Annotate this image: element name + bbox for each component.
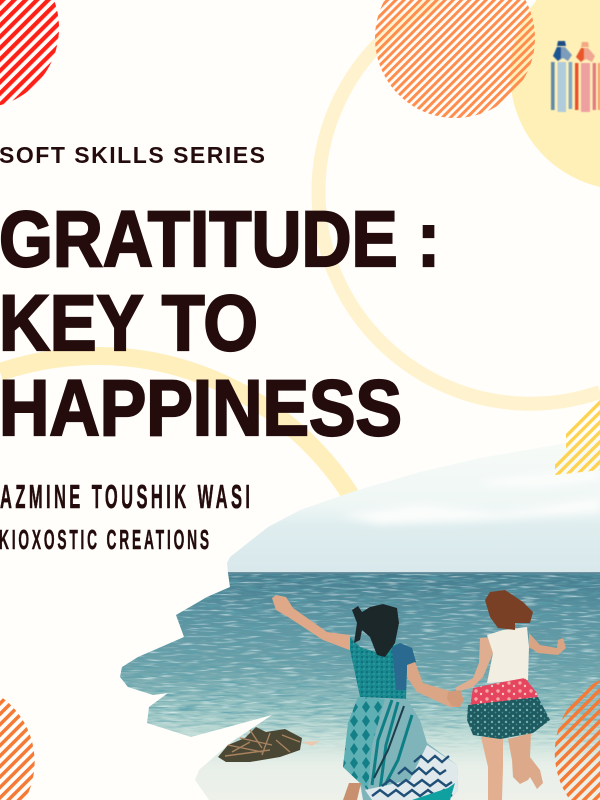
right arm <box>529 633 566 655</box>
sky <box>227 443 600 572</box>
striped orange circle top <box>375 0 535 118</box>
striped orange circle bottom right <box>555 680 600 800</box>
organisation name: KIOXOSTIC CREATIONS <box>0 524 209 555</box>
person: woman in white top <box>447 590 566 800</box>
skirt stripes <box>372 700 412 790</box>
lower leg <box>343 783 361 800</box>
clouds <box>352 481 598 526</box>
red skirt tier <box>470 678 538 707</box>
long skirt <box>343 697 458 800</box>
person: woman in teal dress <box>272 595 463 800</box>
striped red circle top left <box>0 0 59 105</box>
author name: AZMINE TOUSHIK WASI <box>0 478 250 516</box>
decorative large yellow ring <box>318 0 600 404</box>
icon: coloured pencils <box>551 41 600 112</box>
sea <box>110 572 600 800</box>
dark hair <box>352 604 399 657</box>
driftwood pile <box>218 727 320 762</box>
title line 3: HAPPINESS <box>0 363 402 452</box>
series label: SOFT SKILLS SERIES <box>0 142 265 168</box>
blue pencil <box>551 41 572 112</box>
decorative lower yellow ring <box>0 356 355 502</box>
title <box>0 194 440 452</box>
striped yellow shape right <box>555 398 600 475</box>
orange pencil edge <box>598 63 600 110</box>
chevron pattern <box>372 756 452 796</box>
clasped hands <box>447 690 464 707</box>
title line 1: GRATITUDE : <box>0 194 440 283</box>
dark teal skirt tier <box>467 697 550 739</box>
chevron hem <box>365 745 458 800</box>
brown hair <box>485 590 533 630</box>
solid yellow circle top right <box>510 0 600 187</box>
right arm <box>407 662 463 707</box>
striped orange circle bottom left <box>0 696 35 800</box>
teal blouse <box>350 637 416 699</box>
blouse blue shoulder <box>392 643 416 690</box>
title line 2: KEY TO <box>0 278 258 367</box>
beach photo in brush shape <box>110 435 600 800</box>
left arm reaching back <box>455 637 493 692</box>
teal hem patch <box>412 783 455 800</box>
skirt left panel <box>343 697 385 790</box>
leg standing <box>481 737 503 800</box>
horizon <box>228 572 600 574</box>
wave texture <box>120 574 600 750</box>
leg bent <box>508 733 543 789</box>
skirt dark stripe <box>374 706 404 778</box>
red pencil <box>575 42 596 112</box>
raised left arm <box>272 595 352 651</box>
white top <box>487 627 529 683</box>
